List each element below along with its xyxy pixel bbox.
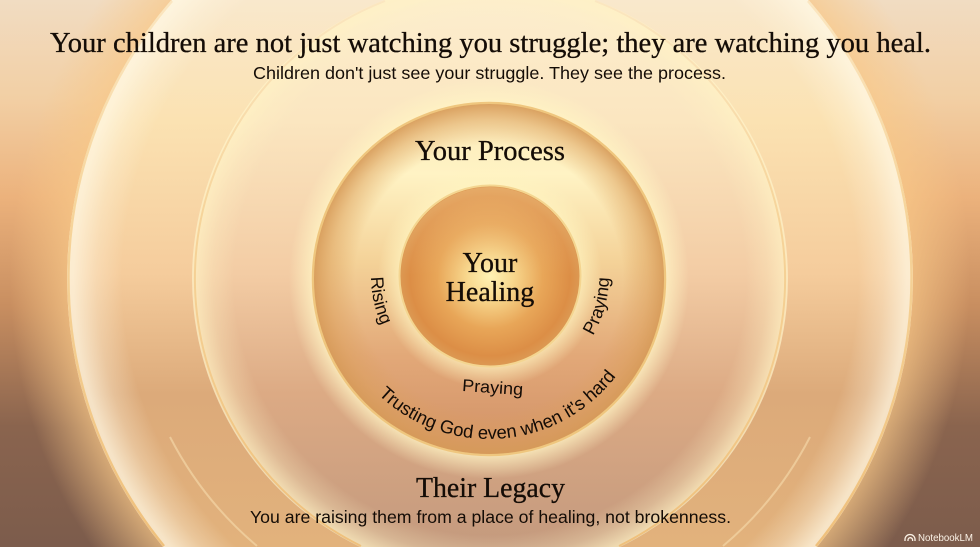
process ring <box>313 103 665 455</box>
body: legacy statement: You are raising them from a place of healing, not brokenness. <box>250 507 731 527</box>
heading: your healing <box>446 248 534 308</box>
glow around process ring <box>289 79 689 479</box>
heading: your healing: Healing <box>446 277 534 308</box>
label: praying bottom: Praying <box>462 376 524 399</box>
heading: their legacy: Their Legacy <box>416 473 565 504</box>
healing core <box>378 164 602 388</box>
watermark: NotebookLM: NotebookLM <box>918 532 973 544</box>
subtitle: Children don't just see your struggle. They see the process. <box>253 63 726 83</box>
heading: your healing: Your <box>463 248 518 279</box>
curved label: rising: Rising <box>370 278 390 325</box>
title: Your children are not just watching you struggle; they are watching you heal. <box>50 28 931 59</box>
icon: notebook arcs <box>905 534 915 541</box>
heading: your process: Your Process <box>415 136 565 167</box>
second ring <box>192 0 788 547</box>
curved label: trusting god: Trusting God even when it's hard <box>382 368 616 439</box>
curved label: praying right: Praying <box>582 278 612 335</box>
